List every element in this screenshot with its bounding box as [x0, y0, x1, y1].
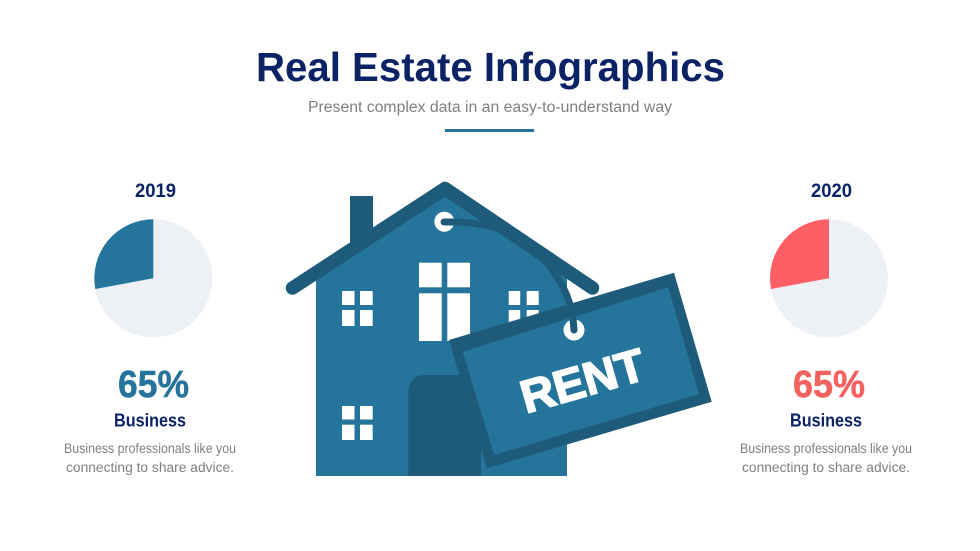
sign hole: [564, 320, 584, 340]
heading: Business: Business: [114, 410, 186, 430]
hanger ring on house: [434, 212, 454, 232]
sign frame: [449, 273, 712, 468]
rent sign: [449, 273, 712, 468]
windows: [342, 263, 539, 440]
door: [408, 375, 481, 476]
panel: 2019: [64, 181, 236, 475]
description: Business professionals like you: [740, 441, 912, 456]
house body: [316, 190, 567, 476]
description: Business professionals like you: [64, 441, 236, 456]
description: [64, 441, 236, 475]
icon: chimney: [350, 196, 373, 248]
header: [256, 44, 725, 132]
pie chart 2020: [770, 219, 888, 337]
sign face: [463, 287, 699, 455]
subtitle: Present complex data in an easy-to-understand way: [308, 99, 672, 116]
title: Real Estate Infographics: [256, 44, 725, 90]
illustration: house with rent sign: [292, 188, 712, 476]
panel: 2020: [740, 181, 912, 475]
RENT label: RENT: [514, 338, 651, 423]
roof: [292, 188, 592, 288]
year label 2020: 2020: [811, 181, 852, 202]
pie chart 2019: [94, 219, 212, 337]
description: connecting to share advice.: [742, 460, 910, 475]
description: [740, 441, 912, 475]
percentage 65%: 65%: [793, 364, 865, 406]
description: connecting to share advice.: [66, 460, 234, 475]
hanging string: [444, 222, 574, 330]
year label 2019: 2019: [135, 181, 176, 202]
heading: Business: Business: [790, 410, 862, 430]
percentage 65%: 65%: [118, 364, 189, 406]
title underline: [445, 129, 534, 132]
